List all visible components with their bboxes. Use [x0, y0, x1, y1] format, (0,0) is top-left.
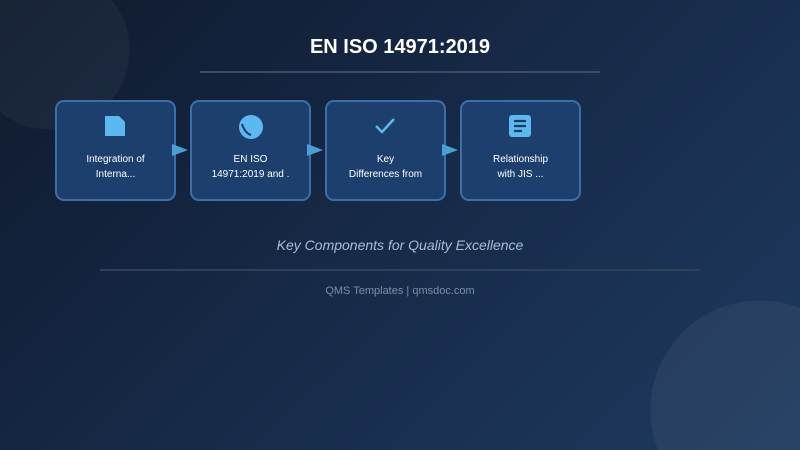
- icon: document: [105, 116, 125, 136]
- step 4: [460, 100, 581, 201]
- arrow 3: [442, 144, 458, 156]
- arrow 2: [307, 144, 323, 156]
- step 3: [325, 100, 446, 201]
- subtitle: Key Components for Quality Excellence: [277, 237, 523, 253]
- step 1: Interna...: [96, 169, 135, 180]
- step 2: 14971:2019 and .: [212, 169, 289, 180]
- step 2: [190, 100, 311, 201]
- step 4: with JIS ...: [497, 169, 544, 180]
- icon: leaf circle: [239, 115, 263, 139]
- title: EN ISO 14971:2019: [310, 36, 490, 58]
- step 3: Differences from: [349, 169, 422, 180]
- step 1: [55, 100, 176, 201]
- footer: QMS Templates | qmsdoc.com: [325, 285, 475, 297]
- arrow 1: [172, 144, 188, 156]
- step 2: EN ISO: [234, 154, 267, 165]
- step 3: Key: [377, 154, 394, 165]
- icon: list document: [509, 115, 531, 137]
- step 1: Integration of: [86, 154, 145, 165]
- step 4: Relationship: [493, 154, 548, 165]
- icon: check: [375, 118, 395, 134]
